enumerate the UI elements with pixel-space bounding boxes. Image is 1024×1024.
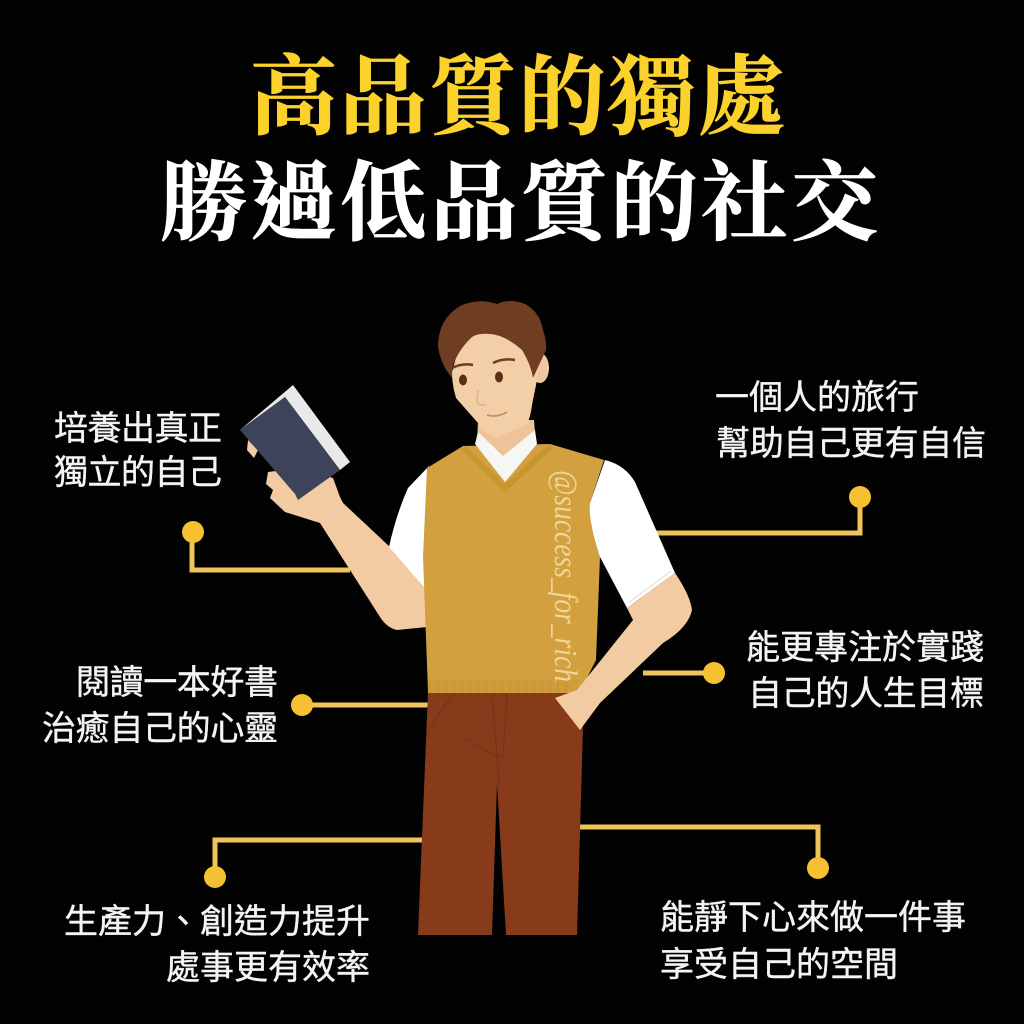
watermark: @success_for_rich [547,470,583,682]
label: top left [54,410,222,492]
label: middle left [42,664,278,748]
head [438,301,549,437]
title [160,49,879,252]
illustration: man holding a book [240,301,692,935]
label: middle left: 治癒自己的心靈 [42,710,278,748]
right arm and hand in pocket [555,573,692,730]
label: middle left: 閱讀一本好書 [76,664,278,702]
label: middle right: 能更專注於實踐 [746,629,984,667]
label: top right [715,379,986,463]
left sleeve [389,466,429,588]
trousers [418,692,585,935]
label: bottom left [64,903,370,987]
label: bottom left: 處事更有效率 [166,949,370,987]
left arm and hand [266,468,427,630]
neck [477,420,536,480]
label: top right: 幫助自己更有自信 [716,425,986,463]
label: bottom left: 生產力、創造力提升 [64,903,370,941]
label: middle right [746,629,984,713]
connector lines and dots [182,486,871,888]
label: top left: 獨立的自己 [54,454,222,492]
title: 高品質的獨處 [250,49,785,146]
label: middle right: 自己的人生目標 [748,675,984,713]
title: 勝過低品質的社交 [160,155,879,252]
book [240,385,350,500]
label: bottom right [660,899,966,984]
sweater vest [423,444,604,693]
label: top left: 培養出真正 [54,410,222,448]
label: bottom right: 享受自己的空間 [660,946,898,984]
right sleeve [590,460,675,608]
finger behind book [247,440,258,458]
label: bottom right: 能靜下心來做一件事 [660,899,966,937]
shirt collar [475,430,537,482]
label: top right: 一個人的旅行 [715,379,919,417]
